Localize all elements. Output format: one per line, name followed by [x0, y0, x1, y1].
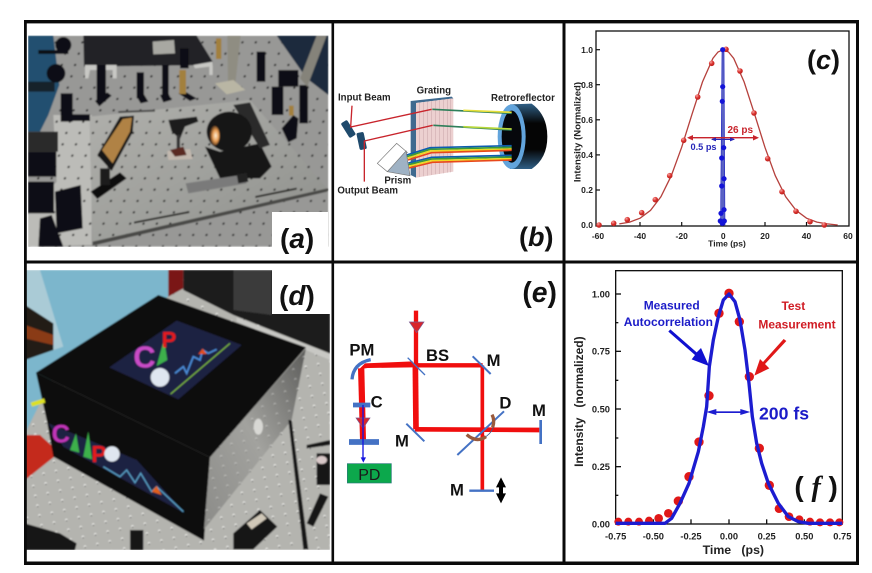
- panel b label: (b): [519, 222, 554, 252]
- output blue arrow: [361, 405, 366, 463]
- rotating delay: [467, 415, 494, 440]
- tick labels: 0.50: [795, 531, 813, 541]
- tick labels: -60: [592, 231, 604, 241]
- tick labels: [572, 45, 853, 248]
- panel a: photo of optical table setup: [28, 36, 328, 247]
- tick labels: 0.0: [581, 220, 593, 230]
- front logo: [48, 421, 185, 513]
- optic labels: [349, 341, 546, 500]
- 26 ps arrow: 26 ps: [728, 125, 754, 136]
- diagram labels: Grating: [417, 86, 451, 97]
- blue data points: [718, 47, 727, 226]
- measured autocorrelation label: Measured: [644, 298, 700, 312]
- tick labels: [592, 289, 851, 541]
- test measurement label: Test: [781, 299, 805, 313]
- top logo: C: [133, 340, 155, 374]
- blue autocorrelation curve: [616, 294, 842, 523]
- dispersed rainbow beams: [407, 146, 512, 168]
- tick labels: 1.0: [581, 45, 593, 55]
- tick labels: -40: [634, 231, 646, 241]
- diagram labels: Retroreflector: [491, 93, 555, 104]
- tick labels: -0.50: [643, 531, 664, 541]
- lamp housing: [186, 102, 272, 193]
- axis ticks: [616, 294, 804, 524]
- panel d label: [272, 270, 330, 314]
- tick labels: -0.75: [605, 531, 626, 541]
- panel b: grating compressor diagram: [337, 86, 555, 196]
- breadboard plate: [89, 100, 327, 246]
- optic labels: PM: [349, 341, 374, 360]
- red beams: [351, 106, 433, 182]
- 0.5 ps arrow: 0.5 ps: [690, 142, 717, 152]
- tick labels: 0.50: [592, 404, 610, 414]
- panel e: interferometer diagram: [347, 277, 557, 503]
- tick labels: Intensity (Normalized): [572, 82, 584, 182]
- box front face: [36, 373, 210, 541]
- tick labels: 20: [760, 231, 770, 241]
- red data points: [614, 289, 843, 526]
- green beams: [432, 109, 512, 130]
- measured autocorrelation label: [624, 298, 713, 329]
- panel f label: ( f ): [794, 471, 838, 503]
- optic labels: M: [395, 432, 409, 451]
- tick labels: 60: [843, 231, 853, 241]
- mirrors: [341, 120, 367, 150]
- chart c: picosecond pulse measurement: [572, 31, 853, 248]
- tick labels: 40: [802, 231, 811, 241]
- optic labels: D: [499, 393, 511, 412]
- optic labels: M: [487, 351, 501, 370]
- diagram labels: Input Beam: [338, 93, 391, 104]
- y axis ticks: [596, 50, 806, 226]
- front logo: C: [52, 421, 70, 449]
- 200 fs label: 200 fs: [759, 403, 809, 423]
- box silver side: [204, 348, 306, 529]
- chart f: femtosecond autocorrelation: Intensity (normalized): [572, 336, 586, 467]
- diagram labels: Prism: [384, 176, 411, 187]
- tick labels: 0.25: [592, 462, 610, 472]
- box top: [36, 295, 306, 457]
- photodiode box: PD: [358, 467, 380, 484]
- 26 ps arrow: [687, 125, 759, 140]
- right side equipment: [25, 420, 330, 550]
- grating: [411, 97, 453, 178]
- tick labels: 1.00: [592, 289, 610, 299]
- translation arrow: [496, 477, 506, 503]
- tick labels: -20: [676, 231, 688, 241]
- front logo: P: [91, 441, 106, 467]
- posts and mounts on table: [28, 37, 308, 247]
- chart f: femtosecond autocorrelation: [572, 271, 851, 557]
- tick labels: 0.00: [720, 531, 738, 541]
- tick labels: 0.2: [581, 185, 593, 195]
- grating on mount: [91, 116, 134, 199]
- panel a label: (a): [280, 223, 314, 254]
- panel c label: (c): [807, 45, 840, 75]
- 0.5 ps arrow: [690, 137, 735, 152]
- red pointer arrow: [754, 339, 786, 376]
- blue trace: [720, 50, 725, 225]
- top logo: [109, 321, 242, 399]
- input arrowhead: [409, 322, 424, 333]
- focused arrowhead: [356, 418, 370, 428]
- tick labels: -0.25: [680, 531, 702, 541]
- tick labels: 0.00: [592, 520, 610, 530]
- diagram labels: Output Beam: [337, 185, 398, 196]
- tick labels: 0.4: [581, 150, 593, 160]
- optic labels: M: [532, 401, 546, 420]
- tick labels: Time (ps): [708, 238, 746, 248]
- tick labels: 0.75: [833, 531, 851, 541]
- tick labels: 0.8: [581, 80, 593, 90]
- tick labels: 0: [721, 231, 726, 241]
- optic labels: BS: [426, 346, 449, 365]
- panel d label: (d): [279, 280, 315, 311]
- tick labels: 0.75: [592, 347, 610, 357]
- prism: [377, 143, 410, 176]
- width arrow: [706, 409, 750, 415]
- diagram labels: [337, 86, 555, 196]
- red fit curve: [619, 50, 838, 225]
- blue optics: [349, 356, 541, 491]
- retroreflector: [498, 104, 547, 169]
- blue pointer arrow: [668, 329, 709, 366]
- red data points: [596, 46, 827, 228]
- tick labels: 0.25: [758, 531, 776, 541]
- red beam path: [413, 311, 539, 490]
- measured autocorrelation label: Autocorrelation: [624, 315, 713, 329]
- panel d: photo of CLIP instrument box: [25, 270, 330, 550]
- small mount center: [167, 117, 198, 160]
- photodiode box: [347, 464, 391, 484]
- axis titles: Time (ps): [703, 543, 764, 557]
- tick labels: 0.6: [581, 115, 593, 125]
- top logo: P: [162, 327, 176, 352]
- optic labels: C: [371, 393, 383, 412]
- panel e label: (e): [522, 277, 557, 309]
- test measurement label: Measurement: [758, 317, 836, 331]
- panel a label: [272, 212, 328, 254]
- test measurement label: [758, 299, 836, 331]
- optic labels: M: [450, 481, 464, 500]
